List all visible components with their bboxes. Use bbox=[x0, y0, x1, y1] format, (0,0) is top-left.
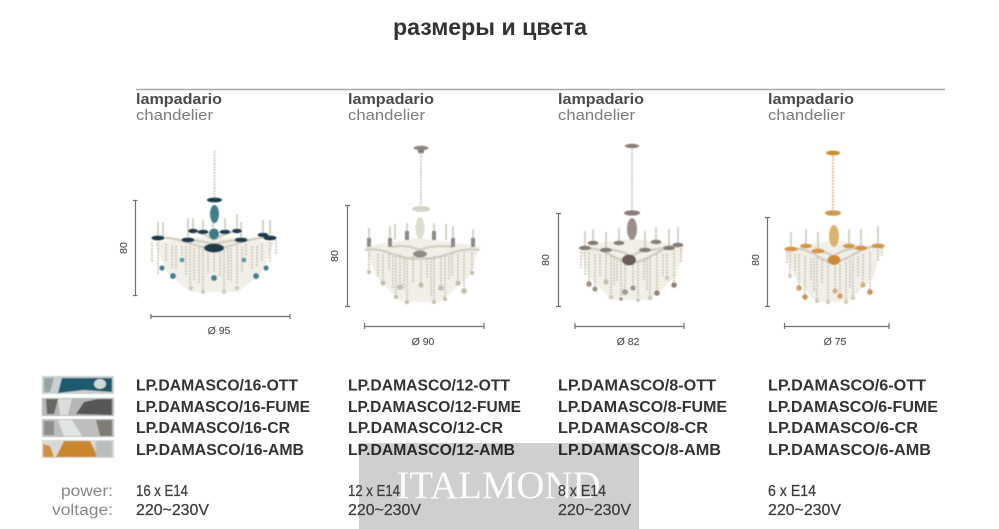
model list: column 4 bbox=[768, 378, 938, 459]
spec labels: voltage: bbox=[52, 502, 113, 519]
model list: column 2: LP.DAMASCO/12-FUME bbox=[348, 399, 521, 416]
specs: column 1: 16 x E14 bbox=[136, 483, 188, 500]
specs: column 3 bbox=[558, 483, 632, 519]
dimensions: column 4 bbox=[750, 218, 889, 348]
dimensions: column 3 bbox=[540, 214, 684, 348]
swatch: chrome bbox=[42, 419, 114, 437]
swatch: fume bbox=[42, 398, 114, 416]
dimensions: column 2: Ø 90 bbox=[412, 336, 435, 348]
specs: column 4 bbox=[768, 483, 842, 519]
chandelier: 8 lights, fume bbox=[579, 144, 684, 302]
model list: column 3: LP.DAMASCO/8-CR bbox=[558, 420, 708, 437]
watermark: ITALMOND bbox=[396, 464, 600, 507]
dimensions: column 3: Ø 82 bbox=[617, 336, 640, 348]
dimensions: column 2: 80 bbox=[329, 250, 341, 262]
model list: column 2: LP.DAMASCO/12-OTT bbox=[348, 378, 511, 394]
model list: column 4: LP.DAMASCO/6-AMB bbox=[768, 442, 931, 459]
column 1 heading bbox=[136, 91, 222, 124]
model list: column 3: LP.DAMASCO/8-AMB bbox=[558, 442, 721, 459]
specs: column 2 bbox=[348, 483, 422, 519]
dimensions: column 1: 80 bbox=[118, 242, 130, 254]
column 1 heading: lampadario bbox=[136, 91, 222, 108]
model list: column 3 bbox=[558, 378, 727, 459]
column 3 heading bbox=[558, 91, 644, 124]
spec labels bbox=[52, 483, 113, 519]
spec labels: power: bbox=[61, 483, 113, 500]
column 4 heading: lampadario bbox=[768, 91, 854, 108]
model list: column 1: LP.DAMASCO/16-CR bbox=[136, 420, 290, 437]
swatch: teal bbox=[42, 376, 114, 394]
specs: column 2: 12 x E14 bbox=[348, 483, 400, 500]
model list: column 3: LP.DAMASCO/8-FUME bbox=[558, 399, 727, 416]
model list: column 1: LP.DAMASCO/16-AMB bbox=[136, 442, 304, 459]
model list: column 3: LP.DAMASCO/8-OTT bbox=[558, 378, 717, 394]
model list: column 2 bbox=[348, 378, 521, 459]
dimensions: column 3: 80 bbox=[540, 254, 552, 266]
specs: column 1: 220~230V bbox=[136, 502, 210, 519]
specs: column 3: 8 x E14 bbox=[558, 483, 606, 500]
specs: column 4: 220~230V bbox=[768, 502, 842, 519]
dimensions: column 4: 80 bbox=[750, 254, 762, 266]
model list: column 1: LP.DAMASCO/16-OTT bbox=[136, 378, 299, 394]
specs: column 3: 220~230V bbox=[558, 502, 632, 519]
specs: column 4: 6 x E14 bbox=[768, 483, 816, 500]
column 3 heading: lampadario bbox=[558, 91, 644, 108]
specs: column 1 bbox=[136, 483, 210, 519]
model list: column 4: LP.DAMASCO/6-FUME bbox=[768, 399, 938, 416]
watermark bbox=[359, 443, 639, 529]
specs: column 2: 220~230V bbox=[348, 502, 422, 519]
dimensions: column 2 bbox=[329, 206, 484, 348]
column 2 heading bbox=[348, 91, 434, 124]
model list: column 1 bbox=[136, 378, 310, 459]
chandelier: 16 lights, teal bbox=[152, 151, 276, 294]
dimensions: column 1 bbox=[118, 200, 290, 337]
title: размеры и цвета bbox=[393, 14, 587, 40]
column 2 heading: lampadario bbox=[348, 91, 434, 108]
dimensions: column 1: Ø 95 bbox=[208, 325, 231, 337]
column 1 heading: chandelier bbox=[136, 107, 213, 124]
chandelier: 12 lights, chrome bbox=[365, 146, 480, 304]
model list: column 2: LP.DAMASCO/12-CR bbox=[348, 420, 503, 437]
column 2 heading: chandelier bbox=[348, 107, 425, 124]
model list: column 4: LP.DAMASCO/6-OTT bbox=[768, 378, 927, 394]
model list: column 4: LP.DAMASCO/6-CR bbox=[768, 420, 918, 437]
model list: column 1: LP.DAMASCO/16-FUME bbox=[136, 399, 310, 416]
swatch: amber bbox=[42, 440, 114, 458]
model list: column 2: LP.DAMASCO/12-AMB bbox=[348, 442, 515, 459]
dimensions: column 4: Ø 75 bbox=[824, 336, 847, 348]
chandelier: 6 lights, amber bbox=[784, 151, 884, 304]
column 4 heading bbox=[768, 91, 854, 124]
column 4 heading: chandelier bbox=[768, 107, 845, 124]
column 3 heading: chandelier bbox=[558, 107, 635, 124]
